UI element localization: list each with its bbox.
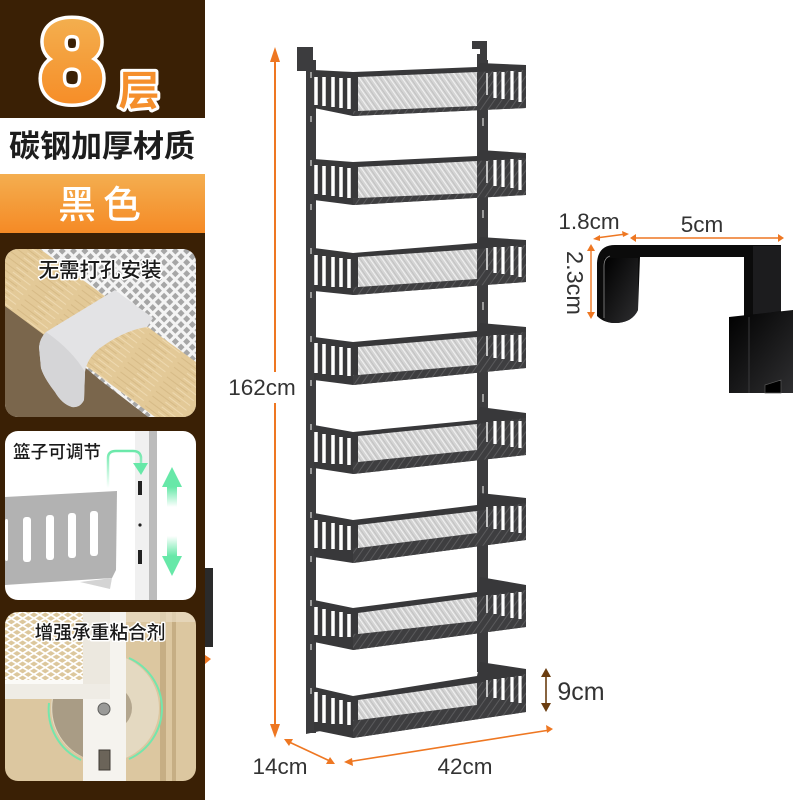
heading: 8 tiers: 层 xyxy=(118,68,160,114)
material banner xyxy=(0,118,205,174)
colour banner xyxy=(0,174,205,233)
shelf 5 xyxy=(314,407,526,474)
white rail xyxy=(83,612,126,781)
green up arrow xyxy=(162,467,182,507)
caption: 篮子可调节 xyxy=(13,442,101,462)
dimension: width 42cm: 42cm xyxy=(437,754,493,779)
caption: 增强承重粘合剂 xyxy=(35,622,165,643)
stray product sliver xyxy=(205,568,213,664)
shelf 8 xyxy=(314,662,526,738)
dimension: width 42cm xyxy=(344,725,553,779)
colour banner: 黑色 xyxy=(58,185,148,227)
shelf 7 xyxy=(314,577,526,650)
hook arm xyxy=(597,245,781,323)
dimension: basket height 9cm xyxy=(541,668,605,712)
rack: left upright xyxy=(297,47,330,734)
rack: right upright xyxy=(472,41,488,672)
panel: adjustable basket xyxy=(5,431,196,600)
dimension: height 162cm: 162cm xyxy=(228,375,296,400)
caption: 无需打孔安装 xyxy=(38,259,162,282)
dimension: 1.8cm xyxy=(558,209,629,241)
mesh basket xyxy=(5,612,83,680)
shelf 2 xyxy=(314,150,526,205)
panel: no drilling installation xyxy=(5,249,196,430)
hook detail xyxy=(597,245,793,393)
dimension: depth 14cm xyxy=(252,739,335,779)
dimension: 2.3cm xyxy=(562,244,595,319)
heading: 8 tiers: 8 xyxy=(41,0,103,124)
dimension: 1.8cm: 1.8cm xyxy=(558,209,620,234)
dimension: 5cm xyxy=(630,212,784,242)
rail hole xyxy=(99,750,110,770)
green hook arrow xyxy=(108,451,148,488)
dimension: 2.3cm: 2.3cm xyxy=(562,251,588,315)
material banner: 碳钢加厚材质 xyxy=(9,129,195,164)
sleeve slot xyxy=(765,380,781,393)
grey basket xyxy=(5,491,117,585)
panel: load-bearing adhesive xyxy=(5,612,196,781)
arm highlights xyxy=(604,256,610,318)
icon: white bracket xyxy=(39,290,153,407)
shelf 1 xyxy=(314,63,526,116)
dimension: depth 14cm: 14cm xyxy=(252,754,308,779)
shelf 4 xyxy=(314,323,526,385)
lower sleeve block xyxy=(729,310,793,393)
dimension: height 162cm xyxy=(228,47,296,738)
heading: 8 tiers: 8 xyxy=(41,0,103,124)
sidebar background xyxy=(0,0,205,800)
dimension: 5cm: 5cm xyxy=(681,212,723,237)
dimension: basket height 9cm: 9cm xyxy=(557,678,605,706)
shelf 3 xyxy=(314,237,526,295)
green ring xyxy=(49,658,162,760)
heading: 8 tiers xyxy=(41,0,160,124)
green down arrow xyxy=(162,536,182,576)
shelf 6 xyxy=(314,493,526,563)
adhesive disc xyxy=(51,654,159,762)
screw xyxy=(98,703,110,715)
rail slots xyxy=(138,481,142,495)
